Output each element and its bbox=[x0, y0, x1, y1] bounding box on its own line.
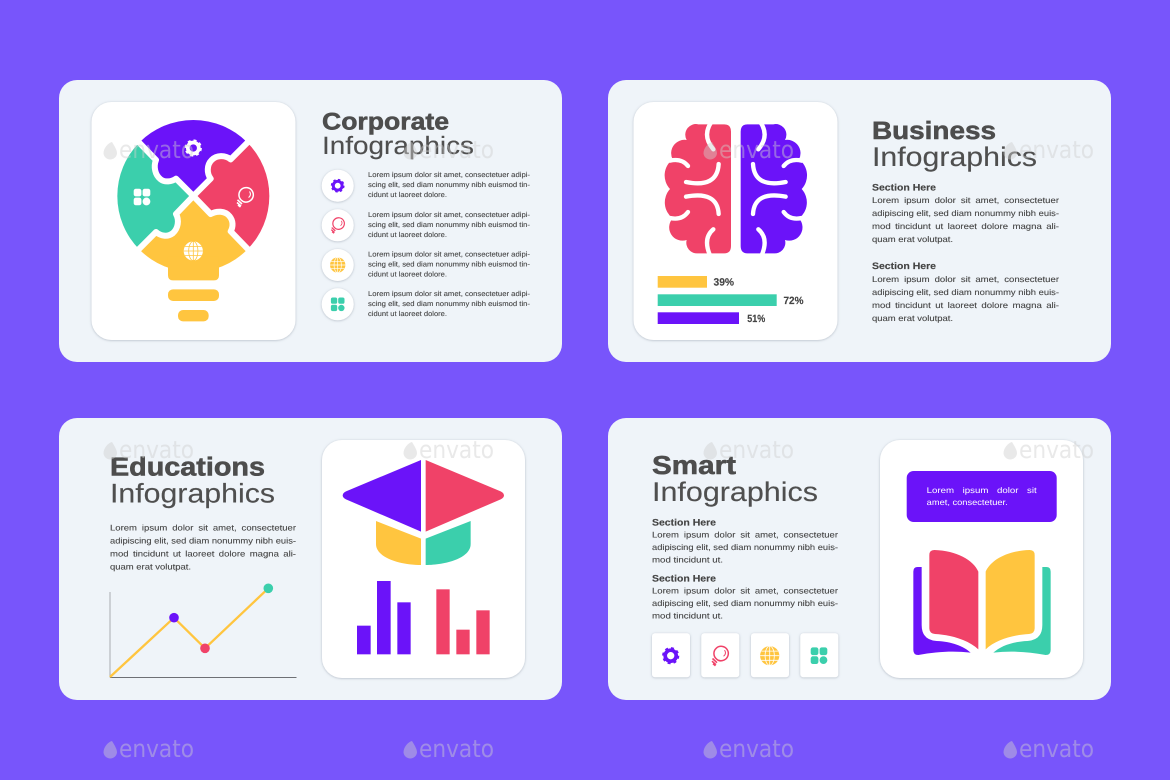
watermarks: envato bbox=[419, 136, 494, 164]
title bbox=[652, 450, 818, 507]
book: left page bbox=[929, 550, 978, 649]
card: brain and bars bbox=[634, 102, 838, 340]
list item: bulb bbox=[322, 209, 531, 241]
cap: left board bbox=[343, 460, 421, 532]
brain: left half bbox=[665, 123, 731, 255]
watermarks: envato bbox=[119, 436, 194, 464]
panel: corporate bbox=[59, 80, 562, 362]
bar chart: 72% bbox=[784, 295, 804, 307]
puzzle piece: green bbox=[117, 144, 189, 247]
puzzle piece: purple bbox=[142, 120, 246, 192]
watermarks: envato bbox=[1019, 436, 1094, 464]
line chart bbox=[110, 584, 296, 678]
text block: section 2: adipiscing elit, sed diam nonummy nibh euis- bbox=[652, 599, 838, 608]
title bbox=[322, 108, 474, 160]
text block: section 1: Lorem ipsum dolor sit amet, consectetuer bbox=[652, 530, 838, 539]
cap: right base bbox=[426, 521, 471, 565]
watermarks bbox=[104, 136, 1094, 763]
watermarks: envato bbox=[719, 436, 794, 464]
callout: Lorem ipsum dolor sit bbox=[927, 486, 1038, 495]
graduation cap bbox=[343, 460, 504, 654]
book: right page bbox=[986, 550, 1035, 649]
watermarks: envato bbox=[1019, 735, 1094, 763]
list item: bulb: scing elit, sed diam nonummy nibh euismod tin- bbox=[368, 221, 531, 229]
list item: globe: scing elit, sed diam nonummy nibh euismod tin- bbox=[368, 261, 531, 269]
title: Infographics bbox=[872, 142, 1037, 172]
list item: grid: Lorem ipsum dolor sit amet, consectetuer adipi- bbox=[368, 290, 531, 298]
purple bars bbox=[357, 581, 411, 654]
card: callout and book bbox=[880, 440, 1083, 678]
text block bbox=[110, 524, 296, 572]
text block: section 1: mod tincidunt ut. bbox=[652, 556, 723, 565]
book: left cover bbox=[913, 567, 971, 655]
icon tile: gear bbox=[652, 633, 690, 677]
callout: amet, consectetuer. bbox=[927, 498, 1008, 507]
text block: section 2 bbox=[872, 260, 1059, 323]
list item: globe bbox=[322, 249, 531, 281]
icon: globe bbox=[184, 241, 203, 261]
cap: right board bbox=[426, 460, 504, 532]
list item: gear: scing elit, sed diam nonummy nibh euismod tin- bbox=[368, 181, 531, 189]
watermarks: envato bbox=[119, 136, 194, 164]
light bulb puzzle diagram bbox=[117, 120, 270, 322]
text block: section 2: mod tincidunt ut. bbox=[652, 612, 723, 621]
icon tile: grid bbox=[800, 633, 838, 677]
bar chart: 39% bbox=[714, 276, 735, 288]
list item: grid: cidunt ut laoreet dolore. bbox=[368, 310, 447, 318]
title: Smart bbox=[652, 450, 736, 480]
icon: grid bbox=[134, 189, 150, 205]
text block: adipiscing elit, sed diam nonummy nibh euis- bbox=[110, 537, 296, 546]
title bbox=[110, 452, 275, 509]
cap: left base bbox=[376, 521, 421, 565]
card: light bulb puzzle bbox=[92, 102, 296, 340]
watermarks: envato bbox=[1019, 136, 1094, 164]
text block: section 1: mod tincidunt ut laoreet dolore magna ali- bbox=[872, 222, 1059, 231]
text block: section 2: Lorem ipsum dolor sit amet, consectetuer bbox=[652, 586, 838, 595]
title: Infographics bbox=[652, 477, 818, 507]
list item: bulb: cidunt ut laoreet dolore. bbox=[368, 231, 447, 239]
text block: section 1: adipiscing elit, sed diam nonummy nibh euis- bbox=[872, 209, 1059, 218]
bulb neck bbox=[168, 257, 219, 280]
brain diagram bbox=[665, 123, 807, 255]
red bars bbox=[436, 589, 490, 654]
list item: grid bbox=[322, 288, 531, 320]
list item: globe: Lorem ipsum dolor sit amet, consectetuer adipi- bbox=[368, 251, 531, 259]
list item: globe: cidunt ut laoreet dolore. bbox=[368, 271, 447, 279]
text block: section 2: adipiscing elit, sed diam nonummy nibh euis- bbox=[872, 288, 1059, 297]
watermarks: envato bbox=[719, 136, 794, 164]
text block: section 2 bbox=[652, 572, 838, 621]
bar chart: 51% bbox=[747, 313, 766, 325]
watermarks: envato bbox=[419, 436, 494, 464]
text block: Lorem ipsum dolor sit amet, consectetuer bbox=[110, 524, 296, 533]
watermarks: envato bbox=[419, 735, 494, 763]
text block: section 1: Section Here bbox=[872, 182, 936, 192]
book: right cover bbox=[993, 567, 1051, 655]
brain: right half bbox=[741, 123, 807, 255]
list item: gear: cidunt ut laoreet dolore. bbox=[368, 191, 447, 199]
bar chart bbox=[658, 276, 804, 325]
text block: section 1 bbox=[652, 517, 838, 565]
text block: section 2: Lorem ipsum dolor sit amet, consectetuer bbox=[872, 275, 1059, 284]
list item: bulb: Lorem ipsum dolor sit amet, consectetuer adipi- bbox=[368, 211, 531, 219]
list item: gear bbox=[322, 170, 531, 202]
text block: section 1 bbox=[872, 182, 1059, 244]
puzzle piece: red bbox=[198, 144, 270, 247]
callout bbox=[907, 471, 1057, 522]
puzzle seams bbox=[137, 140, 250, 251]
title bbox=[872, 117, 1037, 172]
text block: section 2: Section Here bbox=[872, 260, 936, 271]
text block: mod tincidunt ut laoreet dolore magna ali- bbox=[110, 550, 296, 559]
title: Business bbox=[872, 117, 996, 145]
text block: section 1: quam erat volutpat. bbox=[872, 235, 953, 244]
bulb base bar bbox=[168, 289, 219, 301]
title: Infographics bbox=[110, 479, 275, 509]
icon tile: globe bbox=[751, 633, 789, 677]
icon: bulb bbox=[237, 188, 253, 207]
panel: business bbox=[608, 80, 1111, 362]
title: Educations bbox=[110, 452, 265, 482]
text block: section 2: mod tincidunt ut laoreet dolore magna ali- bbox=[872, 301, 1059, 310]
text block: quam erat volutpat. bbox=[110, 563, 191, 572]
icon tile: bulb bbox=[701, 633, 739, 677]
list item: gear: Lorem ipsum dolor sit amet, consectetuer adipi- bbox=[368, 171, 531, 179]
text block: section 1: Section Here bbox=[652, 517, 716, 528]
title: Infographics bbox=[322, 132, 474, 160]
icon: gear bbox=[186, 140, 201, 156]
card: graduation cap and bars bbox=[322, 440, 525, 678]
text block: section 2: Section Here bbox=[652, 572, 716, 583]
open book bbox=[913, 550, 1051, 655]
list item: grid: scing elit, sed diam nonummy nibh euismod tin- bbox=[368, 300, 531, 308]
bulb tip bar bbox=[178, 310, 209, 321]
panel: educations bbox=[59, 418, 562, 700]
watermarks: envato bbox=[119, 735, 194, 763]
text block: section 1: adipiscing elit, sed diam nonummy nibh euis- bbox=[652, 543, 838, 552]
panel: smart bbox=[608, 418, 1111, 700]
text block: section 1: Lorem ipsum dolor sit amet, consectetuer bbox=[872, 196, 1059, 205]
watermarks: envato bbox=[719, 735, 794, 763]
puzzle piece: yellow bbox=[141, 200, 246, 268]
title: Corporate bbox=[322, 108, 449, 136]
text block: section 2: quam erat volutpat. bbox=[872, 314, 953, 323]
